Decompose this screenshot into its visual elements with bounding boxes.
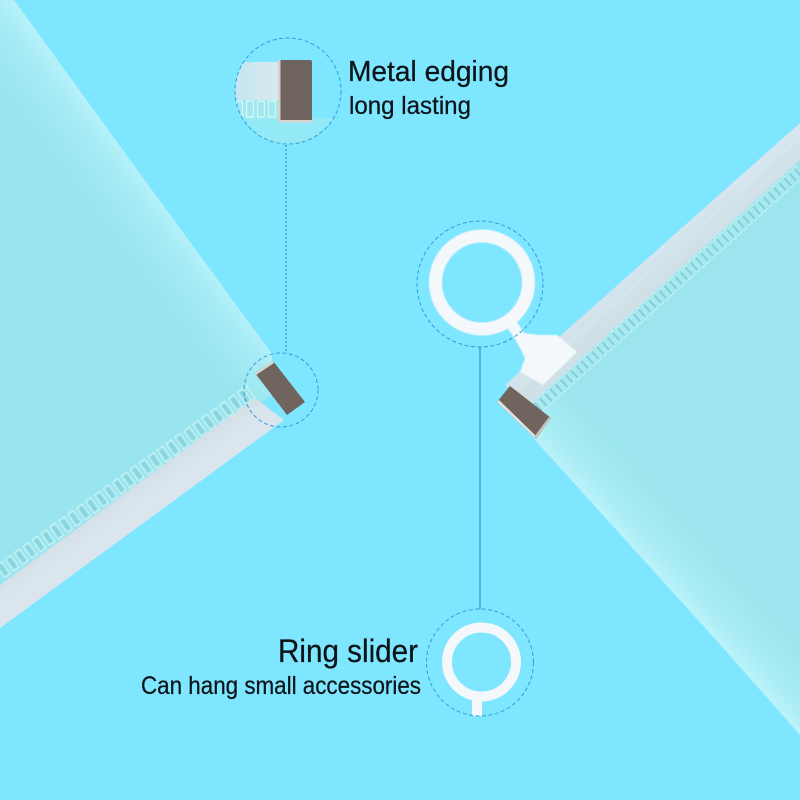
right zipper teeth — [530, 171, 800, 414]
left folder with zipper — [0, 0, 284, 628]
subheading: long lasting — [349, 92, 471, 120]
zoom inset: metal edging — [235, 38, 345, 148]
inset content — [235, 60, 333, 144]
dashed circle: left clip — [244, 353, 318, 427]
label: metal edging — [348, 56, 509, 120]
large ring — [436, 236, 528, 329]
dashed circle — [235, 38, 341, 144]
slider body — [517, 333, 577, 385]
small ring stem — [472, 699, 482, 716]
dashed circle — [426, 609, 534, 716]
right folder with zipper — [505, 123, 800, 735]
zoom inset: ring slider — [426, 609, 534, 716]
label: ring slider — [141, 633, 421, 700]
connector: metal edging — [285, 145, 287, 352]
right zipper strip — [505, 123, 800, 405]
left folder body — [0, 0, 272, 590]
subheading: Can hang small accessories — [141, 672, 421, 700]
connector: ring slider — [479, 347, 481, 609]
right folder body — [520, 160, 800, 735]
heading: Ring slider — [278, 633, 418, 669]
icon: metal clip right — [497, 386, 551, 439]
dashed circle: large ring — [417, 221, 543, 347]
slider neck — [507, 322, 526, 344]
left zipper teeth — [0, 391, 252, 572]
left zipper strip — [0, 398, 284, 628]
icon: metal clip left — [255, 361, 305, 415]
icon: ring slider on zipper — [436, 236, 577, 385]
small ring — [447, 628, 516, 696]
heading: Metal edging — [348, 56, 509, 88]
